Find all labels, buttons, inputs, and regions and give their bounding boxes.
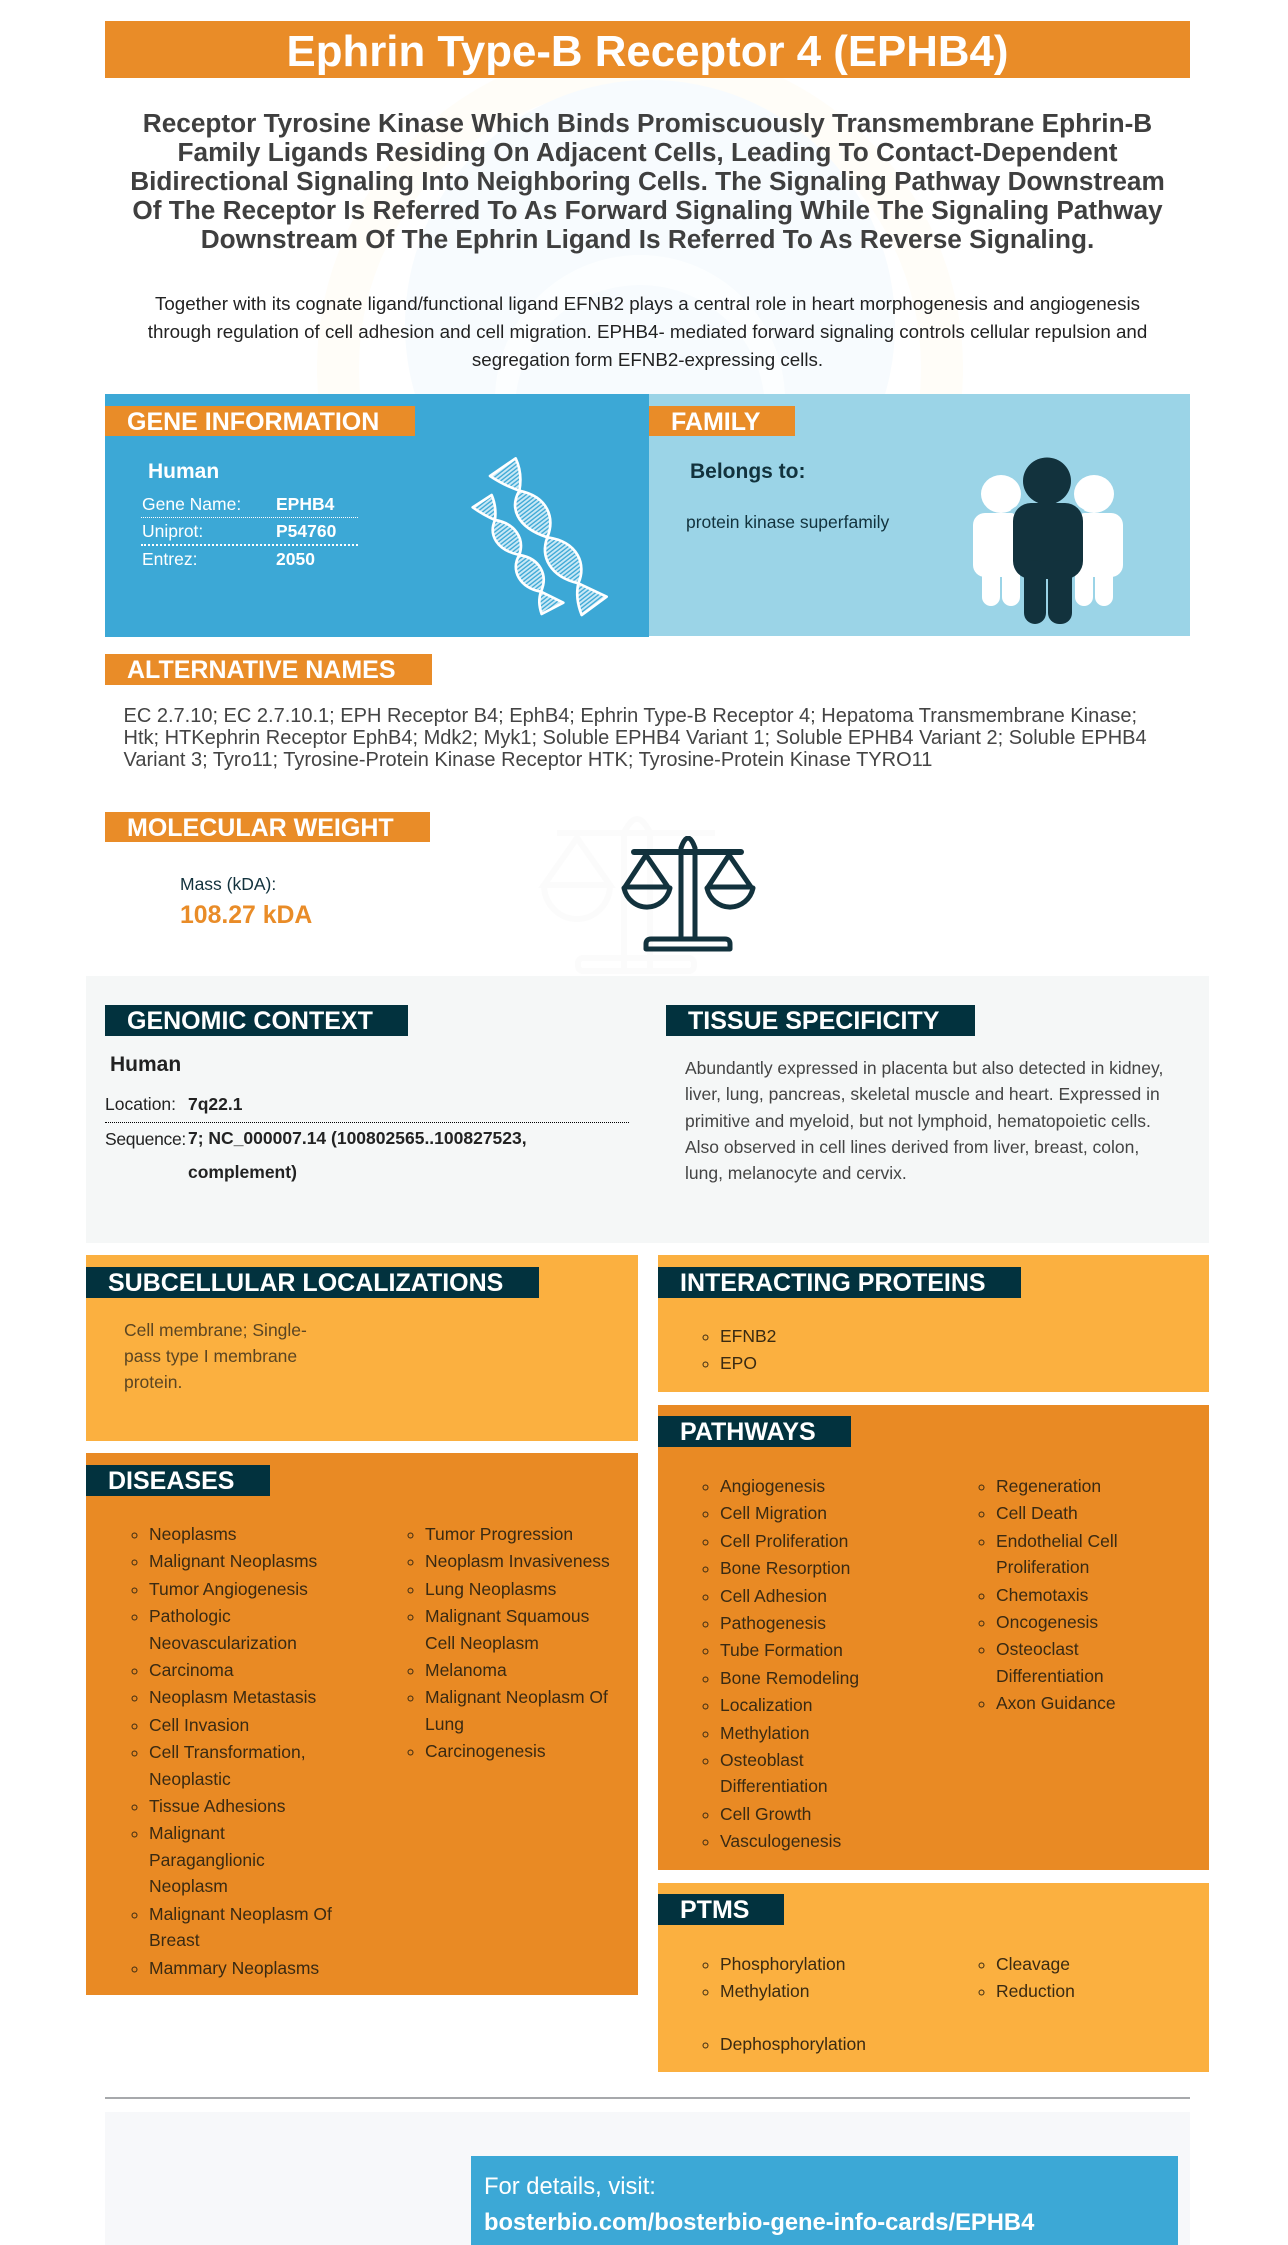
heading: family bbox=[649, 406, 795, 436]
callout: details link bbox=[471, 2156, 1178, 2245]
diseases list column 2: Tumor Progression bbox=[425, 1524, 573, 1544]
genomic context: location: 7q22.1 bbox=[188, 1094, 242, 1114]
pathways list column 2: Proliferation bbox=[996, 1557, 1089, 1577]
subcellular text: Cell membrane; Single- bbox=[124, 1320, 307, 1340]
genomic context: sequence: complement) bbox=[188, 1162, 297, 1182]
PTMs list column 2: Cleavage bbox=[996, 1954, 1070, 1974]
diseases list column 2 bbox=[408, 1524, 610, 1761]
diseases list column 1: Mammary Neoplasms bbox=[149, 1958, 319, 1978]
subcellular text: protein. bbox=[124, 1372, 182, 1392]
diseases list column 1: Breast bbox=[149, 1930, 200, 1950]
diseases list column 2: Lung bbox=[425, 1714, 464, 1734]
heading: molecular weight: MOLECULAR WEIGHT bbox=[127, 814, 394, 842]
alternative names text: Variant 3; Tyro11; Tyrosine-Protein Kinase Receptor HTK; Tyrosine-Protein Kinase TYRO11 bbox=[124, 748, 932, 770]
PTMs list column 2 bbox=[978, 1954, 1075, 2001]
panel: subcellular localizations bbox=[86, 1255, 638, 1441]
callout: details link: For details, visit: bbox=[484, 2173, 656, 2200]
pathways list column 1: Pathogenesis bbox=[720, 1613, 826, 1633]
diseases list column 1: Neoplasms bbox=[149, 1524, 237, 1544]
heading: pathways: PATHWAYS bbox=[680, 1418, 816, 1446]
pathways list column 1: Angiogenesis bbox=[720, 1476, 825, 1496]
diseases list column 1: Pathologic bbox=[149, 1606, 231, 1626]
gene info: table bbox=[141, 494, 358, 569]
diseases list column 1: Neoplasm Metastasis bbox=[149, 1687, 316, 1707]
family: value: protein kinase superfamily bbox=[686, 512, 889, 532]
interacting proteins list: EFNB2 bbox=[720, 1326, 776, 1346]
mass value: 108.27 kDA bbox=[180, 902, 312, 929]
tissue specificity text: primitive and myeloid, but not lymphoid, hematopoietic cells. bbox=[685, 1111, 1151, 1131]
panel: PTMs bbox=[658, 1883, 1209, 2072]
pathways list column 1: Methylation bbox=[720, 1723, 810, 1743]
diseases list column 2: Melanoma bbox=[425, 1660, 507, 1680]
diseases list column 1: Malignant bbox=[149, 1823, 225, 1843]
diseases list column 1: Neoplastic bbox=[149, 1769, 231, 1789]
subtitle: Downstream Of The Ephrin Ligand Is Referred To As Reverse Signaling. bbox=[201, 224, 1094, 254]
interacting proteins list bbox=[702, 1326, 776, 1373]
pathways list column 2: Endothelial Cell bbox=[996, 1531, 1118, 1551]
pathways list column 1: Cell Adhesion bbox=[720, 1586, 827, 1606]
genomic context: location bbox=[105, 1094, 629, 1123]
diseases list column 1: Neovascularization bbox=[149, 1633, 297, 1653]
diseases list column 2: Malignant Neoplasm Of bbox=[425, 1687, 608, 1707]
heading: subcellular localizations: SUBCELLULAR LOCALIZATIONS bbox=[108, 1269, 503, 1297]
alternative names text bbox=[124, 704, 1147, 770]
diseases list column 1: Cell Transformation, bbox=[149, 1742, 306, 1762]
subcellular text bbox=[124, 1320, 307, 1392]
subtitle: Of The Receptor Is Referred To As Forward Signaling While The Signaling Pathway bbox=[132, 194, 1163, 224]
interacting proteins list: EPO bbox=[720, 1353, 757, 1373]
diseases list column 1: Cell Invasion bbox=[149, 1715, 249, 1735]
diseases list column 1: Carcinoma bbox=[149, 1660, 234, 1680]
title bbox=[105, 21, 1190, 78]
genomic context: sequence: Sequence: bbox=[105, 1129, 186, 1149]
diseases list column 1: Tissue Adhesions bbox=[149, 1796, 286, 1816]
subcellular text: pass type I membrane bbox=[124, 1346, 297, 1366]
callout: details link: bosterbio.com/bosterbio-gene-info-cards/EPHB4 bbox=[484, 2209, 1034, 2236]
diseases list column 1 bbox=[132, 1524, 332, 1978]
panel: footer bbox=[105, 2112, 1190, 2245]
pathways list column 2: Chemotaxis bbox=[996, 1585, 1088, 1605]
gene info: species: Human bbox=[148, 460, 219, 483]
diseases list column 2: Cell Neoplasm bbox=[425, 1633, 539, 1653]
icon: balance scales bbox=[622, 836, 756, 952]
heading: interacting proteins: INTERACTING PROTEINS bbox=[680, 1269, 986, 1297]
diseases list column 1: Neoplasm bbox=[149, 1876, 228, 1896]
heading: PTMs: PTMS bbox=[680, 1896, 749, 1924]
diseases list column 1: Malignant Neoplasms bbox=[149, 1551, 317, 1571]
panel: family bbox=[649, 394, 1190, 636]
pathways list column 1: Osteoblast bbox=[720, 1750, 804, 1770]
heading: genomic context: GENOMIC CONTEXT bbox=[127, 1007, 373, 1035]
background watermark logo bbox=[300, 78, 980, 398]
panel: interacting proteins bbox=[658, 1255, 1209, 1392]
panel: diseases bbox=[86, 1453, 638, 1995]
gene info: table: EPHB4 bbox=[276, 494, 334, 514]
pathways list column 2 bbox=[978, 1476, 1118, 1713]
pathways list column 1: Cell Growth bbox=[720, 1804, 811, 1824]
PTMs list column 1: Methylation bbox=[720, 1981, 810, 2001]
pathways list column 2: Regeneration bbox=[996, 1476, 1101, 1496]
pathways list column 1: Differentiation bbox=[720, 1776, 828, 1796]
tissue specificity text: Abundantly expressed in placenta but also detected in kidney, bbox=[685, 1058, 1163, 1078]
panel: pathways bbox=[658, 1405, 1209, 1870]
family: belongs to label: Belongs to: bbox=[690, 460, 806, 483]
heading: diseases: DISEASES bbox=[108, 1467, 234, 1495]
diseases list column 2: Carcinogenesis bbox=[425, 1741, 546, 1761]
title: Ephrin Type-B Receptor 4 (EPHB4) bbox=[287, 27, 1008, 76]
heading: pathways bbox=[658, 1416, 851, 1447]
genomic context: sequence: 7; NC_000007.14 (100802565..100827523, bbox=[188, 1128, 527, 1148]
PTMs list column 2: Reduction bbox=[996, 1981, 1075, 2001]
panel: genomic context and tissue specificity bbox=[86, 976, 1209, 1243]
diseases list column 2: Lung Neoplasms bbox=[425, 1579, 556, 1599]
tissue specificity text: Also observed in cell lines derived from liver, breast, colon, bbox=[685, 1137, 1139, 1157]
genomic context: sequence bbox=[105, 1128, 527, 1182]
gene info: table: P54760 bbox=[276, 521, 336, 541]
mass label: Mass (kDA): bbox=[180, 874, 276, 894]
subtitle: Receptor Tyrosine Kinase Which Binds Promiscuously Transmembrane Ephrin-B bbox=[143, 108, 1152, 138]
tissue specificity text: lung, melanocyte and cervix. bbox=[685, 1163, 907, 1183]
pathways list column 1: Cell Migration bbox=[720, 1503, 827, 1523]
diseases list column 1: Tumor Angiogenesis bbox=[149, 1579, 308, 1599]
heading: PTMs bbox=[658, 1894, 784, 1925]
genomic context: species: Human bbox=[110, 1053, 181, 1076]
subtitle: Family Ligands Residing On Adjacent Cells, Leading To Contact-Dependent bbox=[178, 136, 1117, 166]
pathways list column 2: Oncogenesis bbox=[996, 1612, 1098, 1632]
PTMs list column 1: Phosphorylation bbox=[720, 1954, 846, 1974]
pathways list column 1: Tube Formation bbox=[720, 1640, 843, 1660]
pathways list column 1: Cell Proliferation bbox=[720, 1531, 848, 1551]
gene info: table: Entrez: bbox=[142, 549, 197, 569]
diseases list column 2: Neoplasm Invasiveness bbox=[425, 1551, 610, 1571]
description paragraph: through regulation of cell adhesion and cell migration. EPHB4- mediated forward signaling controls cellular repulsion and bbox=[148, 321, 1147, 342]
pathways list column 1: Localization bbox=[720, 1695, 812, 1715]
icon: DNA helices bbox=[471, 457, 608, 616]
heading: tissue specificity: TISSUE SPECIFICITY bbox=[688, 1007, 939, 1035]
PTMs list column 1 bbox=[702, 1954, 866, 2054]
pathways list column 2: Axon Guidance bbox=[996, 1693, 1116, 1713]
icon: people group bbox=[973, 458, 1123, 624]
heading: alternative names: ALTERNATIVE NAMES bbox=[127, 656, 396, 684]
description paragraph: segregation form EFNB2-expressing cells. bbox=[472, 349, 823, 370]
diseases list column 2: Malignant Squamous bbox=[425, 1606, 589, 1626]
genomic context: location: Location: bbox=[105, 1094, 176, 1114]
alternative names text: Htk; HTKephrin Receptor EphB4; Mdk2; Myk1; Soluble EPHB4 Variant 1; Soluble EPHB4 Variant 2; Soluble EPHB4 bbox=[124, 726, 1147, 748]
tissue specificity text: liver, lung, pancreas, skeletal muscle and heart. Expressed in bbox=[685, 1084, 1160, 1104]
subtitle: Bidirectional Signaling Into Neighboring Cells. The Signaling Pathway Downstream bbox=[130, 166, 1165, 196]
description paragraph bbox=[148, 293, 1147, 370]
gene info: table: Uniprot: bbox=[142, 521, 203, 541]
tissue specificity text bbox=[685, 1058, 1163, 1183]
pathways list column 1 bbox=[702, 1476, 859, 1851]
icon: ghost scales watermark bbox=[535, 812, 725, 977]
panel: gene information bbox=[105, 394, 649, 637]
gene info: table: 2050 bbox=[276, 549, 315, 569]
pathways list column 2: Osteoclast bbox=[996, 1639, 1079, 1659]
gene info: table: Gene Name: bbox=[142, 494, 241, 514]
alternative names text: EC 2.7.10; EC 2.7.10.1; EPH Receptor B4; EphB4; Ephrin Type-B Receptor 4; Hepatoma Transmembrane Kinase; bbox=[124, 704, 1137, 726]
heading: gene information: GENE INFORMATION bbox=[127, 408, 379, 436]
diseases list column 1: Malignant Neoplasm Of bbox=[149, 1904, 332, 1924]
description paragraph: Together with its cognate ligand/functional ligand EFNB2 plays a central role in heart morphogenesis and angiogenesis bbox=[155, 293, 1140, 314]
PTMs list column 1: Dephosphorylation bbox=[720, 2034, 866, 2054]
pathways list column 2: Cell Death bbox=[996, 1503, 1078, 1523]
pathways list column 1: Bone Remodeling bbox=[720, 1668, 859, 1688]
diseases list column 1: Paraganglionic bbox=[149, 1850, 265, 1870]
heading: family: FAMILY bbox=[671, 408, 760, 436]
subtitle bbox=[130, 108, 1165, 254]
heading: diseases bbox=[86, 1465, 270, 1496]
pathways list column 1: Vasculogenesis bbox=[720, 1831, 841, 1851]
pathways list column 2: Differentiation bbox=[996, 1666, 1104, 1686]
pathways list column 1: Bone Resorption bbox=[720, 1558, 850, 1578]
